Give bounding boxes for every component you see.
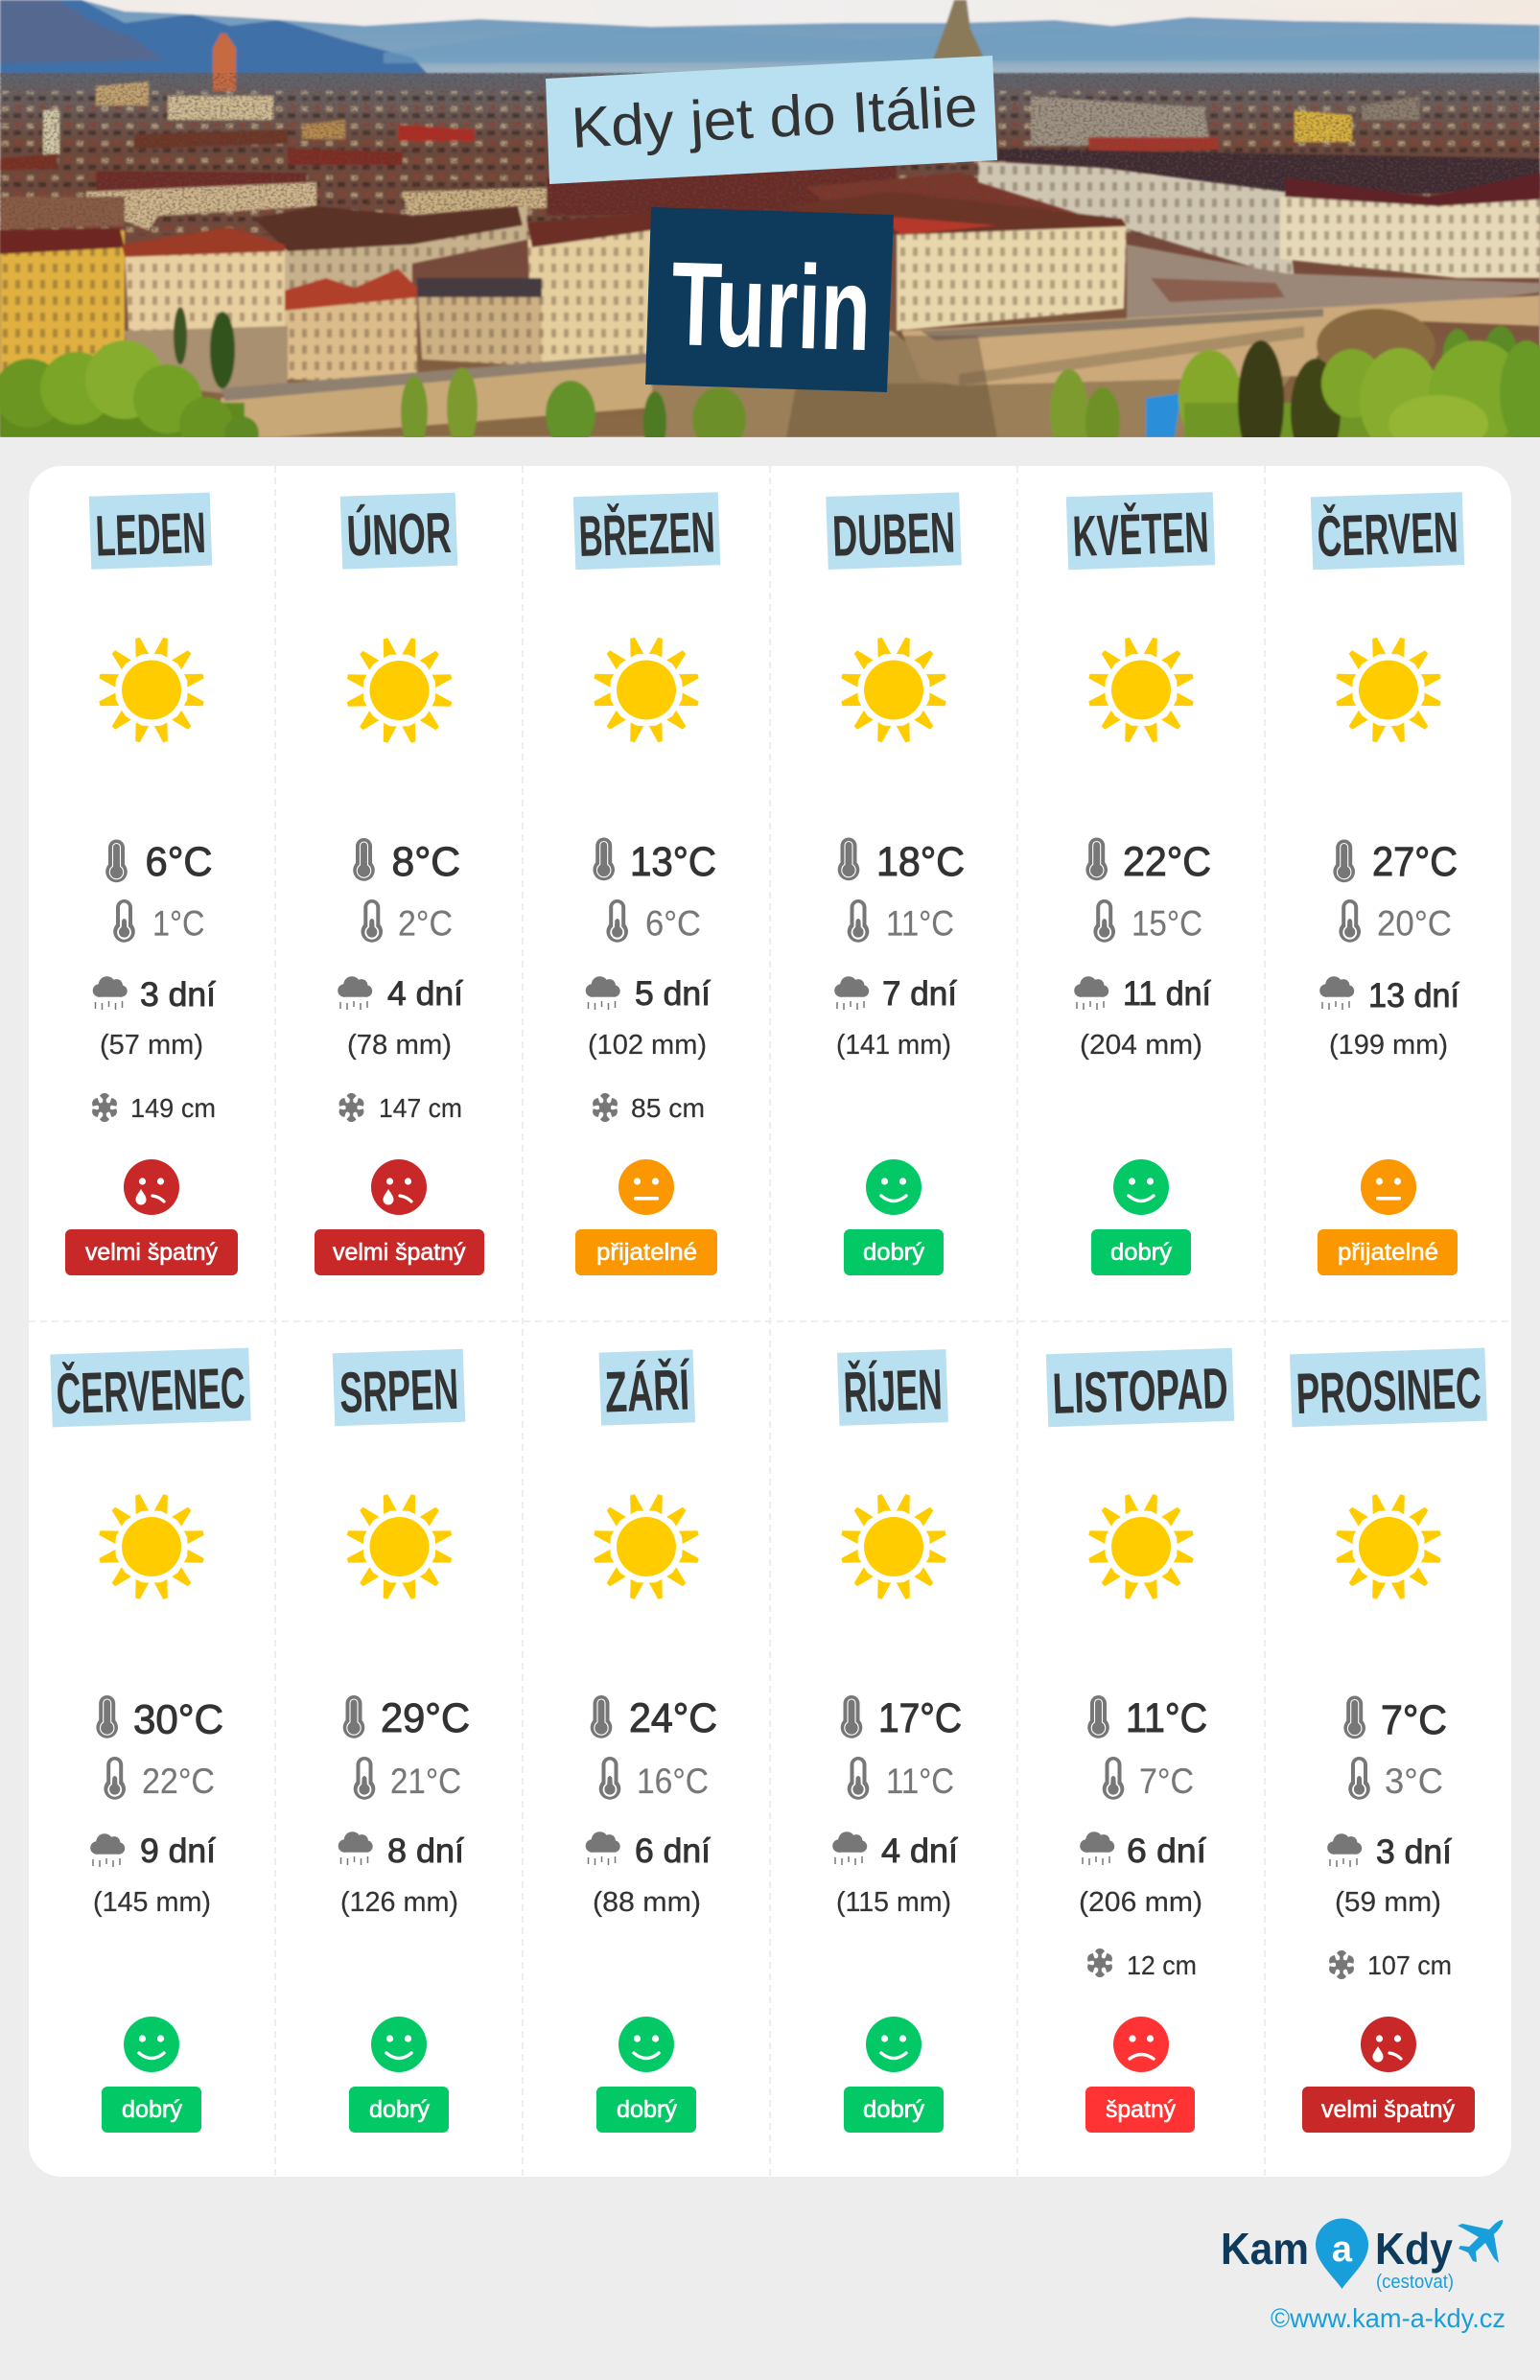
- snowfall: 107 cm: [1367, 1950, 1452, 1980]
- precipitation: (141 mm): [836, 1030, 951, 1061]
- rainy days: 4 dní: [387, 975, 463, 1013]
- low temperature: 16°C: [637, 1762, 709, 1801]
- rating badge: [1085, 2087, 1195, 2133]
- rainy days: [1319, 976, 1459, 1015]
- rainy days: [832, 1832, 958, 1870]
- panel: březen: [573, 492, 720, 1275]
- low temperature: 7°C: [1139, 1762, 1194, 1801]
- rating badge: [575, 1229, 717, 1275]
- high temperature: 6°C: [146, 839, 213, 885]
- logo word: Kam: Kam: [1221, 2224, 1309, 2274]
- rating face: [1361, 2017, 1416, 2072]
- rainy days: [90, 1832, 216, 1870]
- rainy days: [338, 1832, 464, 1870]
- logo: Kam a Kdy: [1221, 2219, 1503, 2293]
- icon: sun: [346, 1493, 453, 1600]
- rating badge: [1302, 2087, 1475, 2133]
- rating badge: [1091, 1229, 1191, 1275]
- low temperature: 15°C: [1132, 904, 1202, 944]
- month label: BŘEZEN: BŘEZEN: [578, 500, 716, 569]
- high temperature: [1085, 838, 1211, 885]
- panel: srpen: [333, 1349, 470, 2133]
- precipitation: (78 mm): [347, 1030, 452, 1061]
- rating badge: [349, 2087, 449, 2133]
- rating badge: dobrý: [863, 2096, 925, 2123]
- rating badge: dobrý: [617, 2096, 677, 2123]
- high temperature: [591, 1695, 717, 1741]
- high temperature: [96, 1695, 223, 1743]
- panel: listopad: [1046, 1348, 1234, 2133]
- snowfall: [1328, 1950, 1452, 1980]
- icon: sun: [840, 1493, 947, 1600]
- rating badge: špatný: [1106, 2096, 1176, 2123]
- low temperature: [1093, 899, 1202, 944]
- icon: sun: [1335, 637, 1442, 743]
- icon: airplane: [1458, 2220, 1503, 2263]
- panel: květen: [1066, 492, 1215, 1275]
- high temperature: [1333, 839, 1458, 885]
- icon: sun: [840, 637, 947, 743]
- rating face: [618, 1159, 674, 1215]
- copyright url: ©www.kam-a-kdy.cz: [1271, 2303, 1505, 2333]
- high temperature: 30°C: [133, 1697, 223, 1743]
- rainy days: [1327, 1833, 1452, 1871]
- high temperature: [593, 838, 716, 885]
- month label: ZÁŘÍ: [599, 1349, 695, 1426]
- rainy days: [1080, 1832, 1206, 1870]
- snowfall: [1086, 1948, 1197, 1980]
- icon: map pin with a: [1316, 2219, 1368, 2289]
- rainy days: [1074, 975, 1211, 1013]
- month label: LISTOPAD: [1046, 1348, 1234, 1427]
- low temperature: 6°C: [645, 904, 701, 944]
- rating face: [1113, 2017, 1169, 2072]
- logo word: Kdy: Kdy: [1375, 2224, 1453, 2274]
- icon: sun: [98, 1493, 205, 1600]
- rating face: [371, 1159, 427, 1215]
- month label: DUBEN: [826, 492, 962, 570]
- month label: ČERVENEC: ČERVENEC: [56, 1356, 246, 1426]
- low temperature: 1°C: [152, 904, 205, 944]
- rating badge: [596, 2087, 696, 2133]
- low temperature: 20°C: [1377, 904, 1452, 944]
- high temperature: 18°C: [876, 839, 965, 885]
- rainy days: 8 dní: [387, 1832, 464, 1870]
- month label: ČERVENEC: [50, 1348, 251, 1427]
- low temperature: 22°C: [142, 1762, 215, 1801]
- month label: LEDEN: LEDEN: [95, 501, 207, 569]
- rating face: [618, 2017, 674, 2072]
- low temperature: [848, 1757, 954, 1801]
- header sign: Kdy jet do Itálie: [546, 56, 997, 184]
- rating badge: [844, 1229, 944, 1275]
- high temperature: 13°C: [630, 839, 716, 885]
- title sign: Turin: Turin: [669, 238, 873, 376]
- high temperature: 17°C: [878, 1695, 962, 1741]
- panel: říjen: [832, 1349, 962, 2133]
- rating badge: dobrý: [1110, 1239, 1173, 1266]
- header sign: Kdy jet do Itálie: Kdy jet do Itálie: [570, 74, 979, 160]
- low temperature: [354, 1757, 461, 1801]
- title sign: Turin: [645, 207, 894, 392]
- rating badge: [65, 1229, 238, 1275]
- precipitation: (88 mm): [593, 1887, 701, 1918]
- high temperature: 29°C: [381, 1695, 470, 1741]
- precipitation: (59 mm): [1335, 1887, 1441, 1918]
- precipitation: (115 mm): [836, 1887, 951, 1918]
- rating face: [124, 1159, 179, 1215]
- high temperature: 8°C: [391, 839, 460, 885]
- rainy days: 9 dní: [140, 1832, 216, 1870]
- high temperature: [1343, 1695, 1447, 1743]
- month label: ÚNOR: [340, 493, 457, 570]
- rainy days: [586, 1832, 711, 1870]
- month label: KVĚTEN: KVĚTEN: [1072, 500, 1210, 569]
- rating badge: velmi špatný: [85, 1239, 218, 1266]
- month label: SRPEN: SRPEN: [338, 1357, 459, 1425]
- rating face: [866, 2017, 922, 2072]
- high temperature: [841, 1695, 962, 1741]
- high temperature: 24°C: [629, 1695, 717, 1741]
- rating badge: přijatelné: [596, 1239, 697, 1266]
- month label: ŘÍJEN: ŘÍJEN: [843, 1357, 944, 1425]
- rating badge: [315, 1229, 484, 1275]
- low temperature: [1103, 1757, 1194, 1801]
- high temperature: [353, 838, 460, 885]
- rainy days: [338, 975, 463, 1013]
- precipitation: (126 mm): [340, 1887, 458, 1918]
- low temperature: 11°C: [886, 1762, 954, 1801]
- month label: BŘEZEN: [573, 492, 720, 570]
- low temperature: [113, 899, 205, 944]
- panel: duben: [826, 492, 965, 1275]
- panel: climate calendar card: [29, 466, 1511, 2177]
- icon: sun: [1087, 1493, 1195, 1600]
- month label: ČERVEN: [1311, 492, 1464, 570]
- rating badge: dobrý: [369, 2096, 430, 2123]
- snowfall: 147 cm: [379, 1093, 462, 1123]
- low temperature: [1339, 899, 1452, 944]
- snowfall: 12 cm: [1127, 1950, 1197, 1980]
- panel: únor: [315, 493, 484, 1275]
- rating face: [371, 2017, 427, 2072]
- low temperature: 21°C: [390, 1762, 461, 1801]
- rainy days: [834, 975, 957, 1013]
- rainy days: [586, 975, 711, 1013]
- icon: sun: [1335, 1493, 1442, 1600]
- icon: sun: [346, 637, 453, 744]
- low temperature: [104, 1757, 215, 1801]
- rating face: [1113, 1159, 1169, 1215]
- high temperature: [343, 1695, 470, 1741]
- rating badge: [102, 2087, 201, 2133]
- low temperature: 3°C: [1385, 1762, 1443, 1801]
- precipitation: (102 mm): [588, 1030, 707, 1061]
- rainy days: 7 dní: [882, 975, 957, 1013]
- month label: LEDEN: [89, 493, 212, 570]
- rating face: [1361, 1159, 1416, 1215]
- icon: sun: [1087, 637, 1195, 743]
- rating badge: dobrý: [122, 2096, 182, 2123]
- rating badge: velmi špatný: [1321, 2096, 1455, 2123]
- rainy days: 5 dní: [635, 975, 711, 1013]
- rating badge: přijatelné: [1338, 1239, 1438, 1266]
- month label: ZÁŘÍ: ZÁŘÍ: [604, 1358, 691, 1424]
- rainy days: 6 dní: [635, 1832, 711, 1870]
- month label: ŘÍJEN: [837, 1349, 948, 1426]
- rainy days: 3 dní: [140, 976, 216, 1014]
- low temperature: 11°C: [886, 904, 954, 944]
- rainy days: 13 dní: [1368, 977, 1459, 1015]
- high temperature: 27°C: [1372, 839, 1458, 885]
- low temperature: [599, 1757, 709, 1801]
- rating face: [866, 1159, 922, 1215]
- snowfall: [91, 1093, 216, 1123]
- high temperature: [838, 838, 965, 885]
- snowfall: 85 cm: [631, 1093, 705, 1123]
- rating badge: [1318, 1229, 1458, 1275]
- precipitation: (199 mm): [1329, 1030, 1448, 1061]
- panel: červen: [1311, 492, 1464, 1275]
- snowfall: [338, 1093, 462, 1123]
- rating badge: dobrý: [863, 1239, 925, 1266]
- rating face: [124, 2017, 179, 2072]
- month label: KVĚTEN: [1066, 492, 1215, 570]
- high temperature: 11°C: [1126, 1695, 1207, 1741]
- month label: SRPEN: [333, 1349, 465, 1426]
- icon: sun: [593, 637, 700, 743]
- precipitation: (57 mm): [100, 1030, 203, 1061]
- rainy days: 11 dní: [1123, 975, 1211, 1013]
- snowfall: [592, 1093, 705, 1123]
- icon: sun: [593, 1493, 700, 1600]
- precipitation: (206 mm): [1079, 1887, 1202, 1918]
- icon: sun: [98, 637, 205, 743]
- rating badge: velmi špatný: [333, 1239, 466, 1266]
- high temperature: 7°C: [1381, 1697, 1447, 1743]
- low temperature: [848, 899, 954, 944]
- rainy days: 4 dní: [881, 1832, 958, 1870]
- low temperature: [361, 899, 453, 944]
- panel: leden: [65, 493, 238, 1275]
- low temperature: 2°C: [398, 904, 453, 944]
- low temperature: [1348, 1757, 1443, 1801]
- panel: červenec: [50, 1348, 251, 2133]
- precipitation: (204 mm): [1080, 1030, 1202, 1061]
- rainy days: 6 dní: [1127, 1832, 1206, 1870]
- icon: map pin with a: a: [1332, 2229, 1353, 2270]
- snowfall: 149 cm: [130, 1093, 216, 1123]
- month label: DUBEN: DUBEN: [831, 501, 956, 569]
- high temperature: [105, 839, 213, 885]
- high temperature: [1087, 1695, 1207, 1741]
- month label: ÚNOR: ÚNOR: [346, 501, 453, 568]
- rainy days: 3 dní: [1376, 1833, 1452, 1871]
- high temperature: 22°C: [1123, 839, 1211, 885]
- logo tagline: (cestovat): [1376, 2272, 1454, 2293]
- rating badge: [844, 2087, 944, 2133]
- month label: LISTOPAD: LISTOPAD: [1052, 1356, 1229, 1426]
- precipitation: (145 mm): [93, 1887, 211, 1918]
- low temperature: [606, 899, 701, 944]
- header photo: Turin skyline: [0, 0, 1540, 466]
- panel: září: [586, 1349, 717, 2133]
- rainy days: [93, 976, 216, 1014]
- panel: prosinec: [1290, 1348, 1487, 2133]
